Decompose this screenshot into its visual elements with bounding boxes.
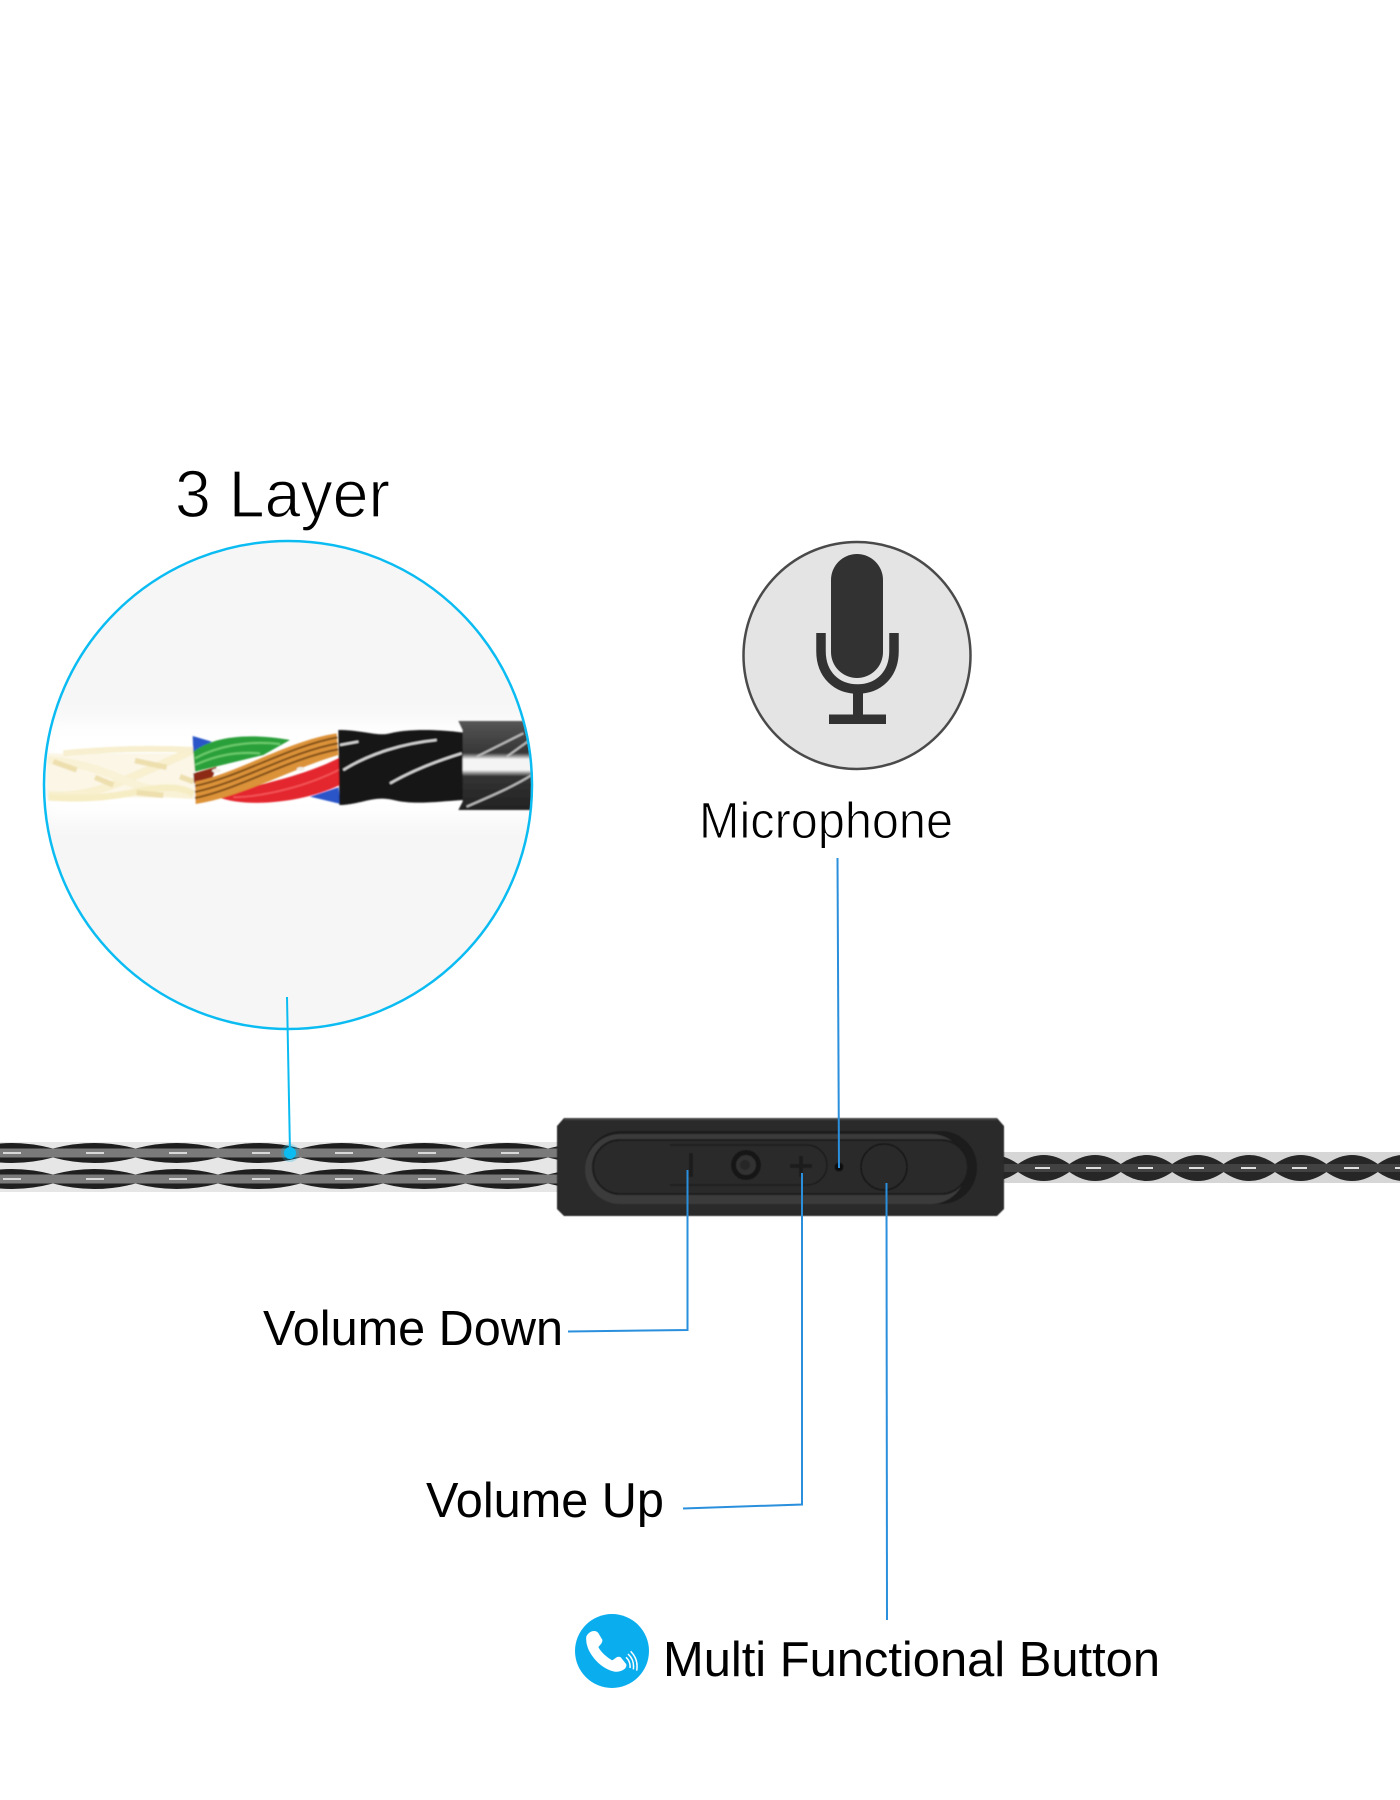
- callout line: volume down: [568, 1170, 688, 1332]
- plus button: [790, 1156, 812, 1177]
- heading: 3 Layer: 3 Layer: [175, 457, 390, 532]
- cream inner strands: [47, 753, 195, 798]
- remote body: [557, 1118, 1004, 1216]
- microphone hole: [834, 1162, 844, 1172]
- ring: [44, 541, 532, 1029]
- callout line: multi functional button: [886, 1183, 888, 1620]
- minus button: [689, 1153, 693, 1177]
- left double cable: [0, 1142, 630, 1192]
- label: Volume Down: Volume Down: [263, 1302, 563, 1356]
- label: Microphone: Microphone: [699, 792, 953, 849]
- label: Volume Up: Volume Up: [426, 1474, 664, 1528]
- panel: cable cross-section magnifier: [40, 541, 540, 1029]
- multi function button: [861, 1144, 907, 1190]
- green strands: [193, 736, 290, 772]
- volume rocker: [670, 1145, 827, 1185]
- callout line: 3 layer: [281, 997, 299, 1162]
- remote control: [557, 1118, 1004, 1216]
- black jacket: [338, 730, 463, 805]
- outer sleeve: [458, 721, 533, 810]
- label: Multi Functional Button: Multi Functional Button: [663, 1633, 1160, 1687]
- callout line: volume up: [683, 1173, 802, 1508]
- centre button: [731, 1150, 761, 1180]
- red strands: [217, 757, 343, 803]
- icon: phone call: [575, 1614, 649, 1688]
- icon: microphone: [744, 542, 970, 769]
- photo: layered cable: [47, 720, 531, 811]
- button ring: [585, 1131, 977, 1204]
- infographic canvas: [0, 470, 1400, 1688]
- callout line: microphone: [838, 858, 839, 1168]
- blue strands: [193, 736, 212, 753]
- right twisted cable: [967, 1152, 1400, 1183]
- orange strands: [195, 733, 338, 804]
